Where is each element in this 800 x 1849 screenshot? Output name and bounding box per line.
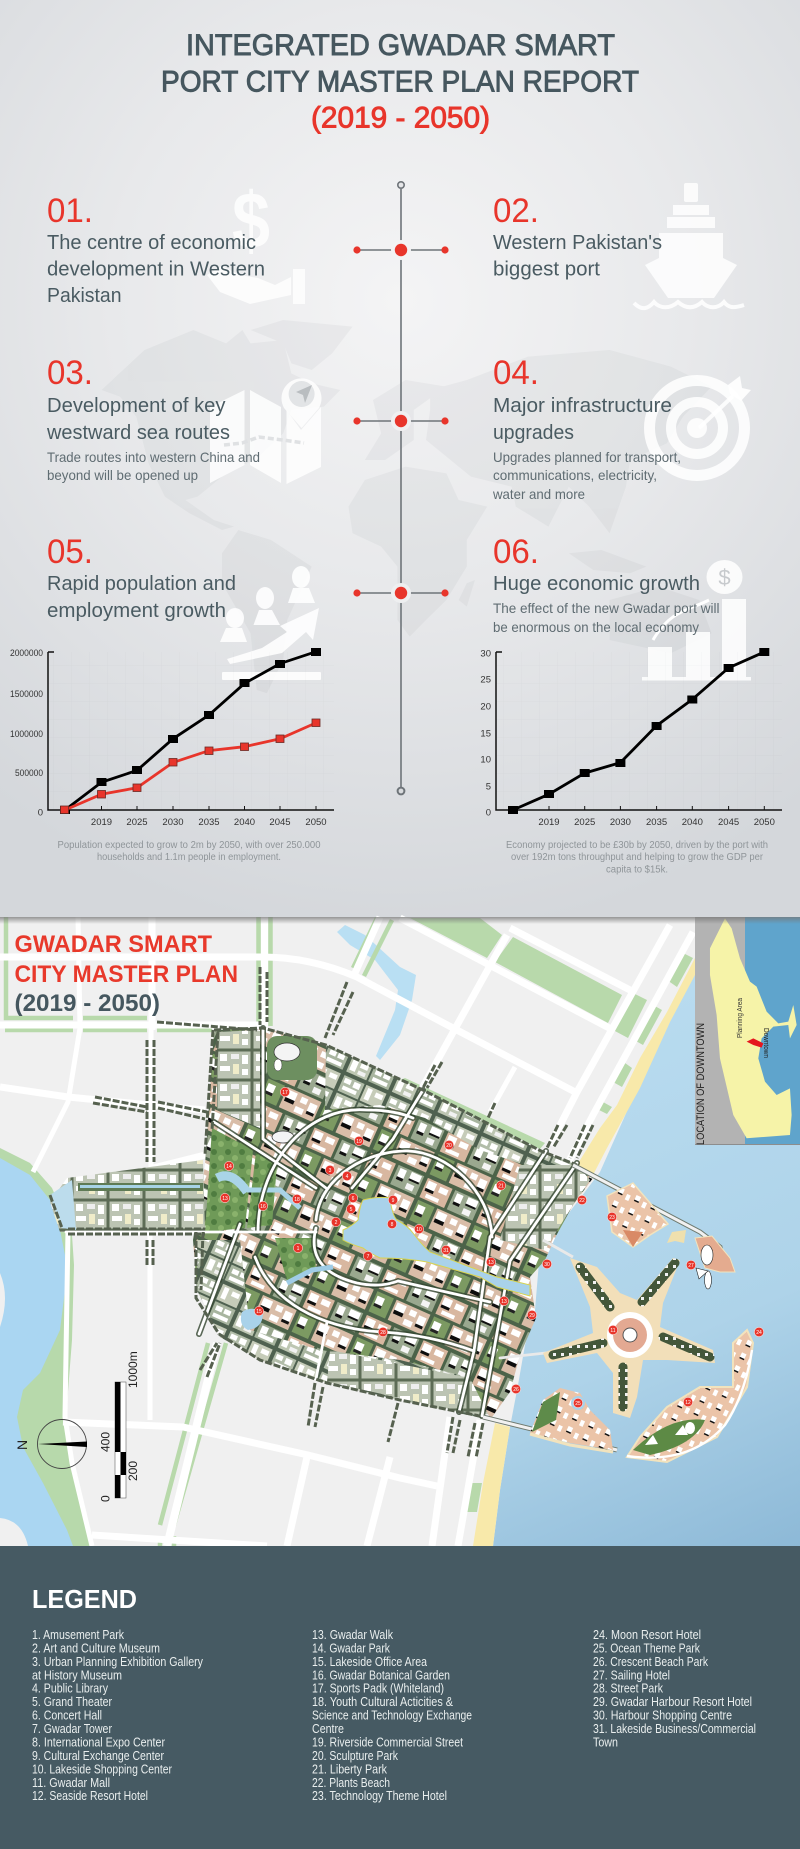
legend heading: LEGEND	[32, 1584, 137, 1614]
line chart: economy: 10	[480, 754, 491, 766]
line chart: economy: 2045	[718, 817, 739, 828]
legend column 1: 5. Grand Theater	[32, 1695, 112, 1709]
text block 01: Pakistan	[47, 285, 122, 307]
panel: master plan map	[0, 917, 800, 1546]
panel: legend	[0, 1546, 800, 1849]
legend column 3	[593, 1628, 756, 1750]
crescent island	[627, 1330, 753, 1462]
line chart: economy: 2025	[574, 817, 595, 828]
legend column 3: 27. Sailing Hotel	[593, 1668, 670, 1682]
legend column 2: 22. Plants Beach	[312, 1776, 390, 1790]
map top shadow	[0, 917, 800, 924]
map marker numbers: 2	[335, 1220, 338, 1226]
map marker numbers: 8	[391, 1222, 394, 1228]
text block 01	[47, 192, 265, 307]
eastern residential quarter	[500, 1165, 590, 1250]
line chart: economy: 2030	[610, 817, 631, 828]
legend column 1: 6. Concert Hall	[32, 1709, 102, 1723]
scale bar: 1000m	[126, 1351, 140, 1388]
text block 03	[46, 354, 260, 483]
line chart: population and employment: 1000000	[10, 729, 43, 740]
text block 01: The centre of economic	[47, 232, 256, 254]
caption: population chart: households and 1.1m people in employment.	[97, 852, 281, 863]
line chart: economy: 25	[480, 674, 491, 686]
line chart: economy: 2040	[682, 817, 703, 828]
caption: economy chart: over 192m tons throughput and helping to grow the GDP per	[511, 852, 764, 863]
map marker numbers: 18	[294, 1197, 300, 1203]
text block 01: 01.	[47, 192, 93, 230]
text block 05: employment growth	[47, 600, 226, 622]
line chart: population and employment: 2050	[305, 817, 327, 828]
tree-lined avenues	[50, 967, 593, 1458]
legend column 1: 7. Gwadar Tower	[32, 1722, 112, 1736]
sports park	[267, 1036, 317, 1143]
legend column 2: 20. Sculpture Park	[312, 1749, 399, 1763]
text block 03: Development of key	[47, 395, 226, 417]
text block 02: biggest port	[493, 258, 600, 280]
legend column 2: 16. Gwadar Botanical Garden	[312, 1668, 450, 1682]
icon: dollar in hand	[207, 176, 305, 304]
scale bar: 200	[126, 1461, 140, 1481]
map marker numbers: 31	[443, 1248, 449, 1254]
line chart: population and employment: 1500000	[10, 689, 43, 700]
map marker numbers: 1	[297, 1246, 300, 1252]
text block 06: The effect of the new Gwadar port will	[493, 600, 720, 616]
line chart: economy: 5	[486, 782, 491, 792]
text block 04: upgrades	[493, 422, 574, 444]
map marker numbers: 14	[226, 1164, 232, 1170]
map marker numbers: 19	[356, 1139, 362, 1145]
caption: population chart	[58, 840, 321, 863]
legend column 2: 17. Sports Padk (Whiteland)	[312, 1682, 444, 1696]
north-west residential block	[217, 1030, 260, 1128]
legend column 3: Town	[593, 1736, 618, 1750]
line chart: economy: 30	[480, 648, 491, 660]
legend column 2: 18. Youth Cultural Acticities &	[312, 1695, 454, 1709]
line chart: population and employment: 2000000	[10, 648, 43, 659]
line chart: economy: 20	[480, 702, 491, 712]
island 25	[530, 1388, 613, 1452]
western green shore	[0, 1148, 92, 1546]
panel: top report section background	[0, 0, 800, 917]
lake and canals	[241, 1197, 530, 1330]
map marker numbers: 25	[575, 1401, 581, 1407]
map marker numbers: 13	[222, 1196, 228, 1202]
map marker numbers: 12	[685, 1400, 691, 1406]
title: (2019 - 2050)	[311, 102, 490, 134]
legend column 3: 25. Ocean Theme Park	[593, 1641, 701, 1655]
ring and radial roads	[66, 1028, 600, 1416]
west peninsula	[50, 1160, 205, 1232]
line chart: population and employment: 2035	[198, 817, 220, 828]
text block 04: communications, electricity,	[493, 467, 657, 483]
line chart: population and employment: 2019	[91, 817, 112, 828]
map marker numbers: 4	[346, 1174, 349, 1180]
map marker numbers: 23	[609, 1215, 615, 1221]
map title	[14, 931, 238, 1017]
icon: ship	[634, 183, 744, 308]
text block 03: westward sea routes	[46, 422, 230, 444]
scale bar	[98, 1351, 140, 1502]
text block 04	[492, 354, 681, 502]
line chart: economy: 2050	[754, 817, 775, 828]
western bay	[0, 1158, 73, 1546]
map marker numbers: 15	[256, 1309, 262, 1315]
line chart: economy: 0	[486, 808, 491, 818]
line chart: population and employment	[10, 648, 334, 828]
caption: economy chart: capita to $15k.	[606, 864, 668, 876]
line chart: population and employment: 2040	[234, 817, 255, 828]
legend column 3: 24. Moon Resort Hotel	[593, 1628, 701, 1642]
line chart: population and employment: 2045	[269, 817, 291, 828]
icon: dollar in hand: $	[232, 176, 270, 265]
legend column 2: 19. Riverside Commercial Street	[312, 1736, 463, 1750]
map marker numbers: 29	[529, 1313, 535, 1319]
legend column 2: 23. Technology Theme Hotel	[312, 1789, 447, 1803]
timeline node 1	[353, 240, 449, 260]
text block 03: Trade routes into western China and	[47, 449, 260, 465]
downtown city blocks	[193, 1028, 593, 1420]
inset: location of downtown: Downtown	[762, 1028, 769, 1058]
road network	[0, 917, 693, 1546]
map marker numbers: 28	[380, 1330, 386, 1336]
beach	[577, 958, 695, 1175]
legend column 1	[32, 1628, 204, 1803]
eastern sea	[493, 958, 800, 1546]
map marker numbers: 5	[350, 1207, 353, 1213]
map marker numbers: 22	[579, 1198, 585, 1204]
text block 06: Huge economic growth	[493, 573, 700, 595]
map marker numbers: 6	[352, 1196, 355, 1202]
map marker numbers: 30	[544, 1262, 550, 1268]
title: INTEGRATED GWADAR SMART	[186, 29, 615, 62]
icon: coin and bar chart: $	[718, 565, 731, 590]
starfish island	[543, 1240, 715, 1418]
text block 04: 04.	[493, 354, 539, 392]
text block 06	[493, 533, 720, 635]
text block 02: 02.	[493, 192, 539, 230]
world map backdrop	[102, 320, 712, 693]
text block 02	[493, 192, 662, 280]
icon: target with arrow	[650, 376, 751, 476]
legend column 1: 3. Urban Planning Exhibition Gallery	[32, 1655, 204, 1669]
map title: CITY MASTER PLAN	[14, 961, 238, 988]
map marker numbers: 7	[367, 1254, 370, 1260]
legend column 3: 28. Street Park	[593, 1682, 664, 1696]
timeline node 3	[353, 583, 449, 603]
legend column 2: Science and Technology Exchange	[312, 1709, 472, 1723]
legend column 1: 10. Lakeside Shopping Center	[32, 1762, 172, 1776]
inset: location of downtown	[695, 917, 800, 1145]
legend column 3: 26. Crescent Beach Park	[593, 1655, 709, 1669]
southern blocks	[327, 1350, 490, 1418]
map marker numbers: 26	[513, 1387, 519, 1393]
legend column 2: 13. Gwadar Walk	[312, 1628, 394, 1642]
legend column 1: 11. Gwadar Mall	[32, 1776, 110, 1790]
southern residential quarter	[197, 1240, 490, 1420]
line chart: population and employment: 2030	[162, 817, 184, 828]
inset land	[710, 918, 797, 1138]
line chart: population and employment: 0	[38, 808, 43, 818]
inset: location of downtown: Planning Area	[737, 998, 744, 1038]
legend column 3: 30. Harbour Shopping Centre	[593, 1709, 732, 1723]
sand islands in bay	[0, 1273, 28, 1546]
northern residential quarter	[325, 1045, 590, 1180]
icon: map with pin	[210, 378, 321, 484]
map marker numbers: 27	[688, 1263, 694, 1269]
legend column 2: Centre	[312, 1722, 344, 1736]
legend column 2: 15. Lakeside Office Area	[312, 1655, 427, 1669]
inset downtown marker	[747, 1038, 763, 1048]
map marker numbers: 9	[392, 1198, 395, 1204]
line chart: economy: 2035	[646, 817, 667, 828]
river	[337, 925, 416, 1060]
icon: coin and bar chart	[642, 560, 751, 680]
legend column 3: 29. Gwadar Harbour Resort Hotel	[593, 1695, 752, 1709]
map marker numbers: 13	[488, 1260, 494, 1266]
legend column 1: 4. Public Library	[32, 1682, 109, 1696]
title	[161, 29, 639, 134]
causeway bridges	[483, 1165, 723, 1450]
text block 02: Western Pakistan's	[493, 232, 662, 254]
legend column 1: 12. Seaside Resort Hotel	[32, 1789, 148, 1803]
text block 03: beyond will be opened up	[47, 467, 198, 483]
green road verges	[5, 917, 392, 1546]
southern beach	[473, 1423, 510, 1546]
map marker numbers: 24	[756, 1330, 762, 1336]
timeline spine	[398, 182, 404, 794]
scale bar: 0	[98, 1495, 112, 1502]
legend column 1: 9. Cultural Exchange Center	[32, 1749, 164, 1763]
map marker numbers: 3	[329, 1168, 332, 1174]
line chart: economy	[480, 648, 782, 828]
legend column 1: 1. Amusement Park	[32, 1628, 125, 1642]
text block 04: water and more	[492, 486, 585, 502]
map marker numbers: 11	[610, 1328, 616, 1334]
text block 03: 03.	[47, 354, 93, 392]
map markers	[220, 1087, 764, 1408]
caption: economy chart	[506, 840, 768, 876]
text block 05	[47, 533, 236, 622]
timeline node 2	[353, 411, 449, 431]
line chart: economy: 2019	[538, 817, 560, 828]
scale bar: 400	[98, 1432, 112, 1452]
text block 01: development in Western	[47, 258, 265, 280]
legend column 2	[312, 1628, 472, 1803]
green parks	[400, 918, 693, 1512]
legend column 1: 2. Art and Culture Museum	[32, 1641, 160, 1655]
caption: economy chart: Economy projected to be £30b by 2050, driven by the port with	[506, 840, 768, 851]
line chart: population and employment: 500000	[15, 768, 43, 779]
compass: N	[14, 1440, 30, 1450]
map marker numbers	[222, 1090, 762, 1407]
icon: people and rising arrow	[220, 566, 321, 680]
text block 06: 06.	[493, 533, 539, 571]
text block 06: be enormous on the local economy	[493, 619, 699, 635]
caption: population chart: Population expected to grow to 2m by 2050, with over 250.000	[58, 840, 321, 851]
map marker numbers: 20	[446, 1143, 452, 1149]
line chart: population and employment: 2025	[126, 817, 148, 828]
text block 04: Major infrastructure	[493, 395, 672, 417]
map marker numbers: 16	[260, 1204, 266, 1210]
legend column 2: 14. Gwadar Park	[312, 1641, 391, 1655]
text block 05: Rapid population and	[47, 573, 236, 595]
map marker numbers: 21	[498, 1184, 504, 1190]
inset: location of downtown: LOCATION OF DOWNTOWN	[695, 1023, 707, 1145]
legend column 2: 21. Liberty Park	[312, 1762, 388, 1776]
map title: (2019 - 2050)	[14, 990, 160, 1017]
parks 13 14 and 16	[205, 1128, 316, 1281]
legend column 1: at History Museum	[32, 1668, 122, 1682]
map marker numbers: 13	[501, 1299, 507, 1305]
sailing hotel island	[667, 1230, 735, 1289]
text block 05: 05.	[47, 533, 93, 571]
map land base	[0, 917, 800, 1546]
text block 04: Upgrades planned for transport,	[493, 449, 681, 465]
legend column 3: 31. Lakeside Business/Commercial	[593, 1722, 756, 1736]
legend column 1: 8. International Expo Center	[32, 1736, 165, 1750]
island 23	[607, 1183, 668, 1247]
map title: GWADAR SMART	[14, 931, 212, 958]
map marker numbers: 10	[416, 1227, 422, 1233]
title: PORT CITY MASTER PLAN REPORT	[161, 66, 639, 98]
map marker numbers: 17	[282, 1090, 288, 1096]
compass	[14, 1420, 87, 1468]
line chart: economy: 15	[480, 728, 491, 740]
